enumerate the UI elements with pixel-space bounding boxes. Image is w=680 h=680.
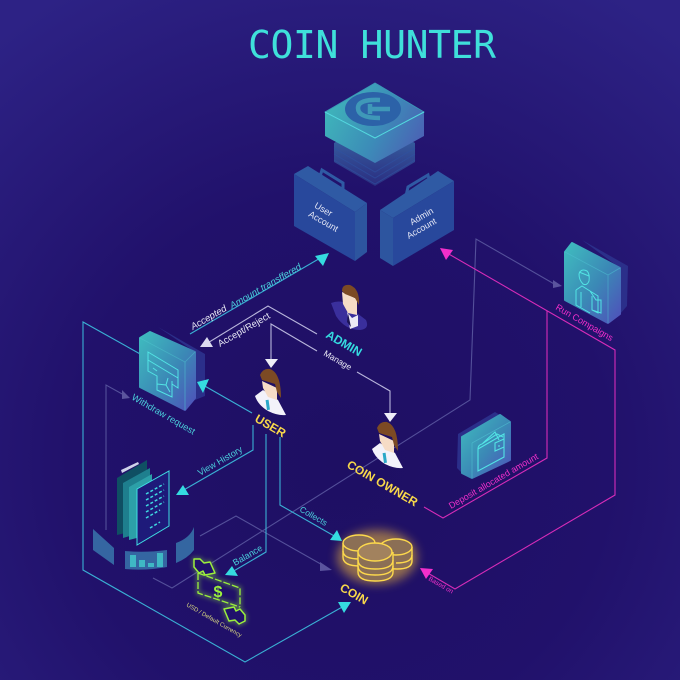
person outline (576, 270, 601, 313)
label: collects: Collects (298, 504, 329, 528)
label: amount transferred: Amount transffered (227, 261, 304, 312)
label: view history: View History (196, 444, 245, 478)
arrow: grey coin (320, 562, 332, 571)
arrow: grey campaigns (553, 280, 562, 288)
icon: user person (255, 369, 286, 415)
arrow: pink admin (440, 248, 453, 260)
label: balance: Balance (231, 543, 264, 568)
icon: run campaigns tile (565, 240, 628, 323)
icon: admin person (331, 285, 367, 330)
icon: wallet tile (457, 412, 510, 478)
label: user account: Account (307, 209, 341, 234)
icon: document hub (93, 460, 194, 570)
connector lines (83, 239, 615, 662)
arrow: collects (330, 530, 342, 541)
label: run campaigns: Run Compaigns (554, 302, 615, 343)
icon: user account briefcase (294, 166, 367, 261)
label: withdraw request: Withdraw request (130, 392, 197, 437)
arrow: amount transferred (315, 253, 329, 266)
icon: currency exchange (194, 559, 245, 624)
arrow: accept reject (200, 337, 213, 347)
cyan flow lines (83, 257, 344, 662)
bars (130, 553, 163, 567)
icon: admin account briefcase (380, 171, 454, 266)
arrow: pink coin (420, 568, 433, 579)
label: admin account: Admin (408, 206, 435, 227)
arrow: view history (176, 485, 189, 495)
icon: coin owner person (372, 422, 403, 468)
pink flow lines (424, 253, 615, 589)
arrow: to user (265, 359, 278, 368)
label: user: USER (252, 411, 289, 440)
icon: withdraw tile (140, 327, 205, 410)
label: admin account: Account (405, 216, 439, 241)
label: admin account (405, 206, 439, 241)
label: coin: COIN (338, 580, 370, 608)
label: based on: Based on (427, 576, 455, 596)
icon: coin platform cube (325, 83, 424, 186)
arrow: to withdraw (197, 379, 209, 393)
text labels (130, 261, 615, 639)
arrow: grey withdraw (122, 390, 130, 399)
label: deposit allocated amount: Deposit allocated amount (447, 451, 540, 511)
arrow: coin (338, 602, 351, 613)
label: admin: ADMIN (324, 327, 365, 359)
label: accepted: Accepted (188, 303, 229, 333)
icon: coins (337, 530, 417, 584)
white flow lines (206, 306, 390, 416)
icon: currency exchange: $ (214, 584, 223, 601)
label: manage: Manage (322, 348, 354, 372)
arrowheads (122, 248, 562, 613)
label: coin owner: COIN OWNER (344, 457, 420, 509)
arrow: balance (225, 566, 238, 576)
label: accept reject: Accept/Reject (216, 311, 273, 350)
title: COIN HUNTER (248, 23, 496, 67)
arc panels (93, 527, 194, 570)
arrow: to coin owner (384, 413, 397, 422)
label: user account: User (313, 200, 334, 218)
grey flow lines (106, 239, 556, 588)
label: usd default currency: USD / Default Currency (185, 603, 242, 639)
